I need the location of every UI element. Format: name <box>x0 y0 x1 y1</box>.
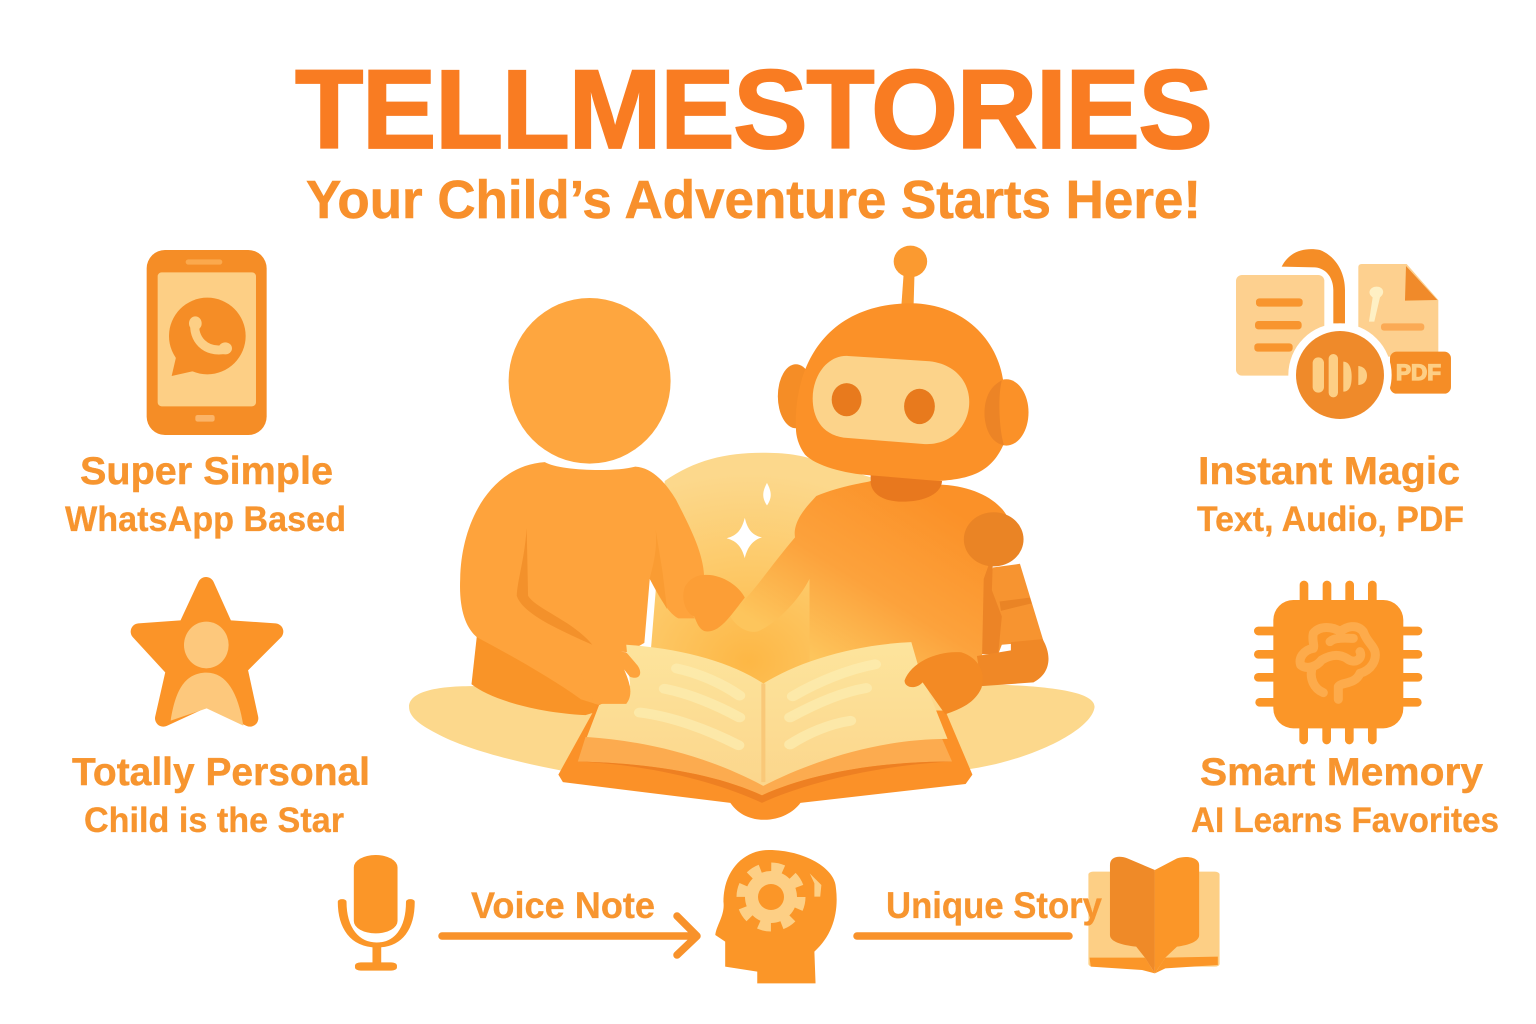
title: TELLMESTORIES <box>295 47 1213 172</box>
feature: Super Simple <box>65 250 346 539</box>
heading: Super Simple <box>80 450 333 493</box>
heading: Smart Memory <box>1200 751 1483 794</box>
child side fold <box>650 530 667 609</box>
subheading: WhatsApp Based <box>65 500 346 539</box>
process flow <box>342 850 1220 983</box>
page text lines <box>640 664 875 745</box>
central illustration: child and robot reading a book <box>409 246 1095 820</box>
feature: Instant Magic <box>1197 249 1464 539</box>
icon: brain chip <box>1258 585 1418 740</box>
robot eyes <box>832 383 862 416</box>
robot body <box>730 481 1006 692</box>
subtitle: Your Child’s Adventure Starts Here! <box>306 170 1201 230</box>
child head <box>509 298 671 464</box>
sparkle large <box>727 518 762 558</box>
child lower body <box>471 635 613 715</box>
book pages <box>587 642 948 786</box>
subheading: Child is the Star <box>84 801 344 840</box>
robot shoulder <box>964 512 1024 566</box>
book dark edge <box>578 761 952 803</box>
child figure <box>460 298 704 715</box>
robot left ear <box>778 364 814 428</box>
icon: story book <box>1088 857 1220 973</box>
feature: Smart Memory <box>1191 585 1499 840</box>
sparkle small <box>763 483 771 505</box>
arrow: voice note to AI <box>442 916 697 955</box>
robot neck <box>871 473 942 502</box>
icon: text, audio and PDF documents <box>1236 249 1451 427</box>
robot figure <box>730 246 1048 692</box>
child hand on book <box>581 650 640 704</box>
robot right ear <box>984 379 1029 446</box>
child arm fold <box>517 528 592 645</box>
book page edges <box>578 737 952 795</box>
book cover <box>558 705 972 820</box>
ground shape <box>409 684 1095 771</box>
flow label: Unique Story: Unique Story <box>886 885 1102 926</box>
book spine <box>759 684 768 782</box>
feature: Totally Personal <box>72 585 370 840</box>
icon: text, audio and PDF documents: PDF <box>1396 360 1441 385</box>
robot forearm <box>977 639 1048 686</box>
icon: head with gear <box>715 850 837 983</box>
icon: phone with WhatsApp <box>147 250 267 435</box>
heading: Totally Personal <box>72 751 370 794</box>
subheading: Text, Audio, PDF <box>1197 500 1464 539</box>
subheading: AI Learns Favorites <box>1191 801 1499 840</box>
flow label: Voice Note: Voice Note <box>471 885 655 926</box>
robot head <box>796 303 1004 481</box>
heading: Instant Magic <box>1198 450 1460 493</box>
glow behind the figures <box>644 453 871 729</box>
robot hand on book <box>905 652 983 714</box>
icon: microphone <box>342 855 410 971</box>
line: AI to story <box>857 932 1069 940</box>
open book <box>558 642 972 820</box>
robot back arm <box>979 564 1043 654</box>
child small hand <box>683 575 745 632</box>
robot visor <box>813 356 969 444</box>
robot antenna <box>901 274 914 306</box>
child upper body <box>460 462 704 705</box>
icon: star with person <box>139 585 275 726</box>
